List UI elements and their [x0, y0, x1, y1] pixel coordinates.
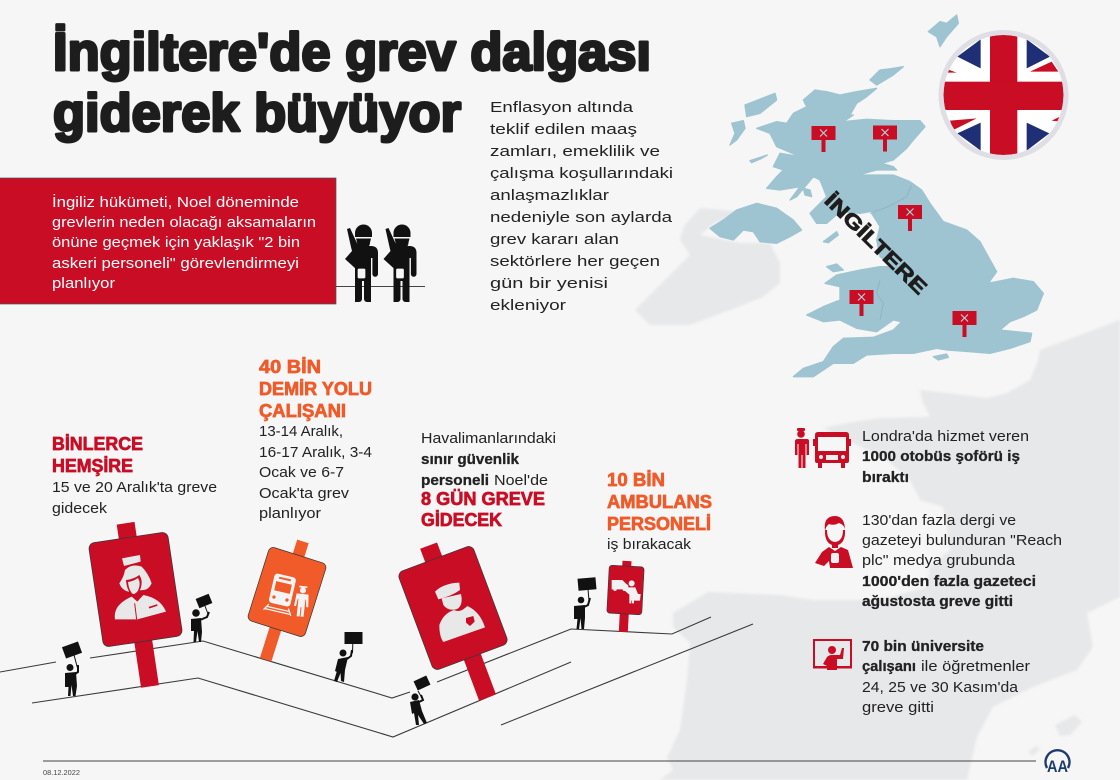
text: railway workers: Ocak ve 6-7: [259, 464, 344, 481]
text: bus drivers: bıraktı: [862, 469, 909, 486]
placard: ambulance staff: [606, 560, 644, 633]
text block: introduction: çalışma koşullarındaki: [490, 165, 673, 182]
text block: introduction: zamları, emeklilik ve: [490, 143, 660, 160]
protester 2: [191, 594, 212, 642]
text: airport border staff: GİDECEK: [421, 510, 502, 530]
text: bus drivers: 1000 otobüs şoförü iş: [862, 448, 1020, 465]
callout: soldiers: planlıyor: [52, 276, 115, 292]
text: university staff: ile öğretmenler: [921, 658, 1030, 675]
callout: soldiers: İngiliz hükümeti, Noel döneminde: [52, 193, 299, 211]
text: nurses: gidecek: [52, 500, 108, 517]
text block: introduction: ekleniyor: [490, 297, 566, 314]
text block: introduction: sektörlere her geçen: [490, 253, 660, 270]
text: journalists: plc" medya grubunda: [862, 552, 1016, 569]
text: bus drivers: [862, 428, 1029, 486]
logo: AA: AA: [1047, 757, 1068, 776]
text block: introduction: gün bir yenisi: [490, 275, 608, 292]
title: [53, 23, 651, 143]
text: nurses: BİNLERCE: [52, 434, 143, 454]
text: railway workers: 13-14 Aralık,: [259, 423, 343, 440]
logo: AA: [1046, 750, 1070, 776]
placard: railway workers: [237, 532, 332, 669]
protester 3: [334, 632, 362, 682]
text: university staff: [862, 638, 1030, 716]
text: university staff: 24, 25 ve 30 Kasım'da: [862, 679, 1019, 696]
callout: soldiers: [0, 178, 336, 304]
text: university staff: çalışanı: [862, 658, 916, 675]
icon: bus driver and bus: [795, 428, 851, 468]
text: railway workers: 16-17 Aralık, 3-4: [259, 444, 372, 461]
icon: strike sign Scotland west: [812, 126, 836, 152]
text: journalists: gazeteyi bulunduran "Reach: [862, 532, 1062, 549]
text: airport border staff: personeli: [421, 472, 489, 489]
text block: introduction: grev kararı alan: [490, 231, 619, 248]
text: nurses: 15 ve 20 Aralık'ta greve: [52, 479, 217, 496]
placard: nurses: [86, 517, 190, 692]
text: nurses: HEMŞİRE: [52, 456, 133, 476]
text: railway workers: planlıyor: [259, 505, 321, 522]
text: railway workers: Ocak'ta grev: [259, 485, 350, 502]
placard: border staff: [392, 531, 524, 712]
text block: introduction: teklif edilen maaş: [490, 121, 637, 138]
protester 4: [410, 676, 430, 725]
text: airport border staff: Havalimanlarındaki: [421, 430, 556, 447]
text: bus drivers: Londra'da hizmet veren: [862, 428, 1029, 445]
map: United Kingdom: [710, 15, 1043, 377]
text block: introduction: [490, 99, 673, 314]
icon: journalist: [815, 516, 853, 568]
text: journalists: 130'dan fazla dergi ve: [862, 512, 1016, 529]
text: ambulance staff: PERSONELİ: [607, 514, 711, 534]
text: railway workers: ÇALIŞANI: [259, 401, 346, 421]
protester 1: [62, 641, 82, 696]
callout: soldiers: askeri personeli" görevlendirmeyi: [52, 256, 299, 272]
text block: introduction: anlaşmazlıklar: [490, 187, 609, 204]
text block: introduction: Enflasyon altında: [490, 99, 634, 116]
text: ambulance staff: iş bırakacak: [607, 536, 692, 553]
text: ambulance staff: [607, 470, 712, 553]
text: airport border staff: Noel'de: [494, 472, 548, 489]
text: university staff: 70 bin üniversite: [862, 638, 984, 655]
icon: strike sign London: [952, 311, 976, 337]
title: giderek büyüyor: [53, 84, 461, 143]
text: nurses: [52, 434, 217, 517]
icon: strike sign Scotland east: [873, 126, 897, 152]
icon: teacher at board: [813, 639, 852, 670]
text: railway workers: [259, 357, 372, 522]
text: journalists: [862, 512, 1062, 610]
map label: İNGİLTERE: [820, 189, 931, 299]
icon: strike sign Wales: [850, 290, 874, 316]
footer rule: [43, 760, 1036, 762]
icon: strike sign northern England: [898, 205, 922, 231]
road lines: [0, 617, 753, 737]
text: journalists: 1000'den fazla gazeteci: [862, 573, 1036, 590]
text: airport border staff: 8 GÜN GREVE: [421, 489, 545, 509]
text: ambulance staff: AMBULANS: [607, 492, 712, 512]
text: airport border staff: [421, 430, 556, 530]
protester 5: [574, 577, 596, 629]
text: ambulance staff: 10 BİN: [607, 470, 665, 490]
text: journalists: ağustosta greve gitti: [862, 593, 1013, 610]
map: background land in grey: [635, 208, 1120, 780]
text block: introduction: nedeniyle son aylarda: [490, 209, 673, 226]
date: 08.12.2022: [43, 768, 80, 777]
text: railway workers: 40 BİN: [259, 357, 321, 377]
text: railway workers: DEMİR YOLU: [259, 379, 372, 399]
icon: two soldiers: [336, 224, 425, 302]
callout: soldiers: önüne geçmek için yaklaşık "2 bin: [52, 235, 300, 251]
text: university staff: greve gitti: [862, 699, 934, 716]
text: airport border staff: sınır güvenlik: [421, 451, 520, 468]
callout: soldiers: grevlerin neden olacağı aksamaların: [52, 215, 316, 231]
title: İngiltere'de grev dalgası: [53, 23, 651, 82]
icon: UK flag: [940, 30, 1070, 160]
